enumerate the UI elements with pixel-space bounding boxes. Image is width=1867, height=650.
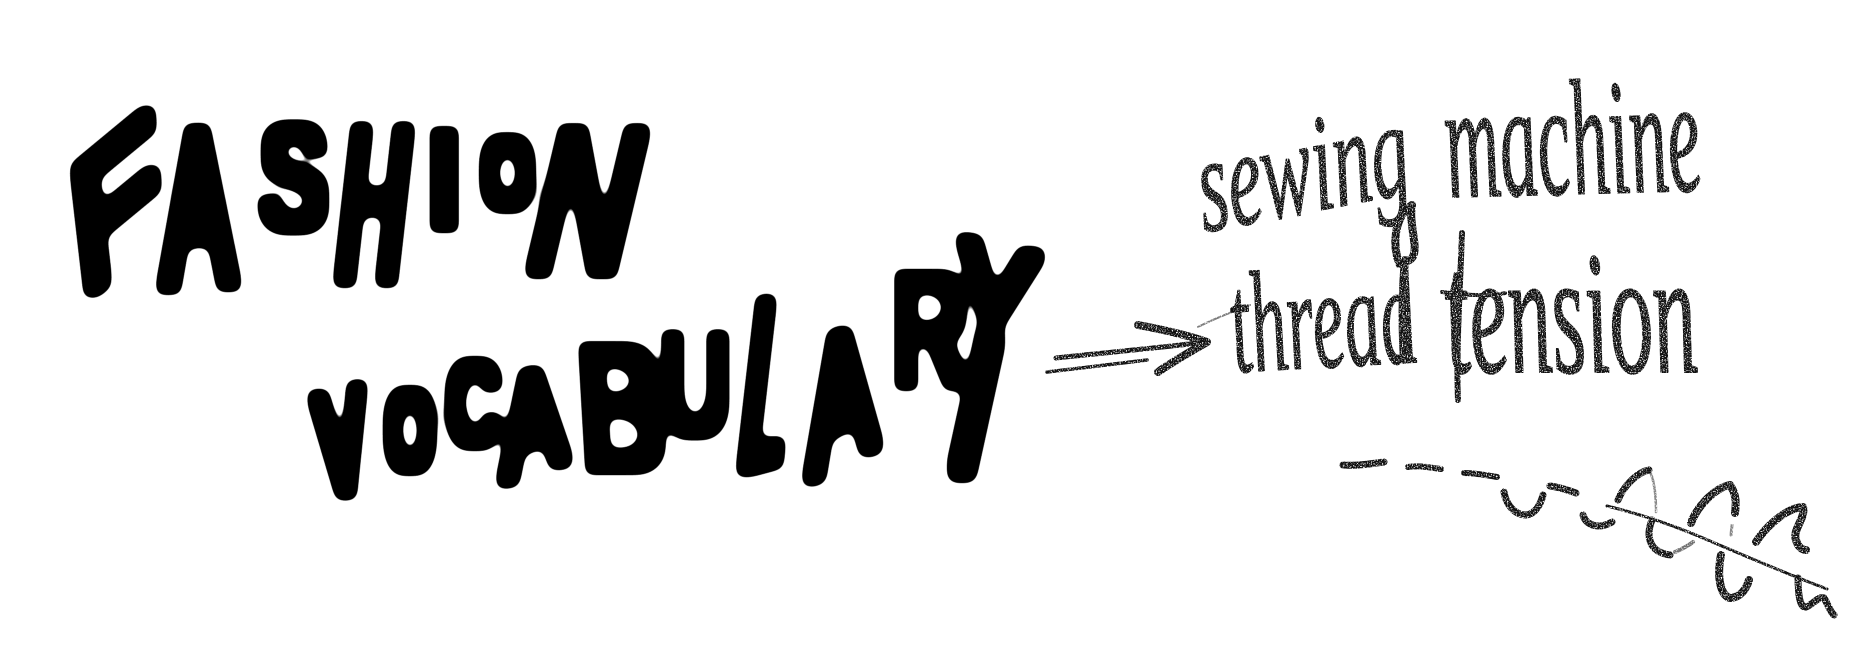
title: brush lettering [61, 69, 1046, 530]
handwritten text: sewing machine [1186, 45, 1710, 263]
title word: VOCABULARY: A [498, 332, 567, 512]
title word: VOCABULARY: A [804, 278, 878, 520]
handwritten words [1186, 45, 1710, 411]
title word: VOCABULARY: Y [940, 200, 1046, 416]
crayon sketch group [1047, 45, 1834, 615]
title word: VOCABULARY: C [448, 341, 499, 468]
brush tail of the Y stem [962, 340, 990, 468]
title word: VOCABULARY: B [573, 312, 670, 506]
title word: FASHION: I [422, 105, 466, 255]
title word: VOCABULARY [311, 200, 1046, 530]
title word: VOCABULARY: U [661, 307, 730, 462]
title word: VOCABULARY: V [311, 354, 372, 530]
title word: FASHION: S [260, 98, 327, 258]
title word: FASHION: F [61, 69, 172, 338]
handwritten text: thread tension [1218, 217, 1706, 411]
handwritten text: thread tension: thread [1218, 234, 1426, 403]
title word: FASHION: A [161, 79, 235, 337]
title word: VOCABULARY: R [893, 243, 967, 418]
title word: FASHION: N [511, 85, 665, 316]
stitch line: dashes turning into loops [1343, 462, 1834, 615]
handwritten text: thread tension: tension [1432, 217, 1706, 411]
handwritten text: sewing machine: sewing [1186, 73, 1418, 263]
title word: VOCABULARY: O [387, 370, 433, 492]
arrow pointing to thread tension [1047, 305, 1250, 372]
title word: FASHION: O [483, 121, 532, 227]
title word: VOCABULARY: L [731, 240, 804, 524]
title word: FASHION: H [328, 82, 420, 329]
pen flourishes joining the handwriting [1395, 205, 1505, 400]
handwritten text: sewing machine: machine [1432, 45, 1710, 233]
title word: FASHION [61, 69, 665, 338]
